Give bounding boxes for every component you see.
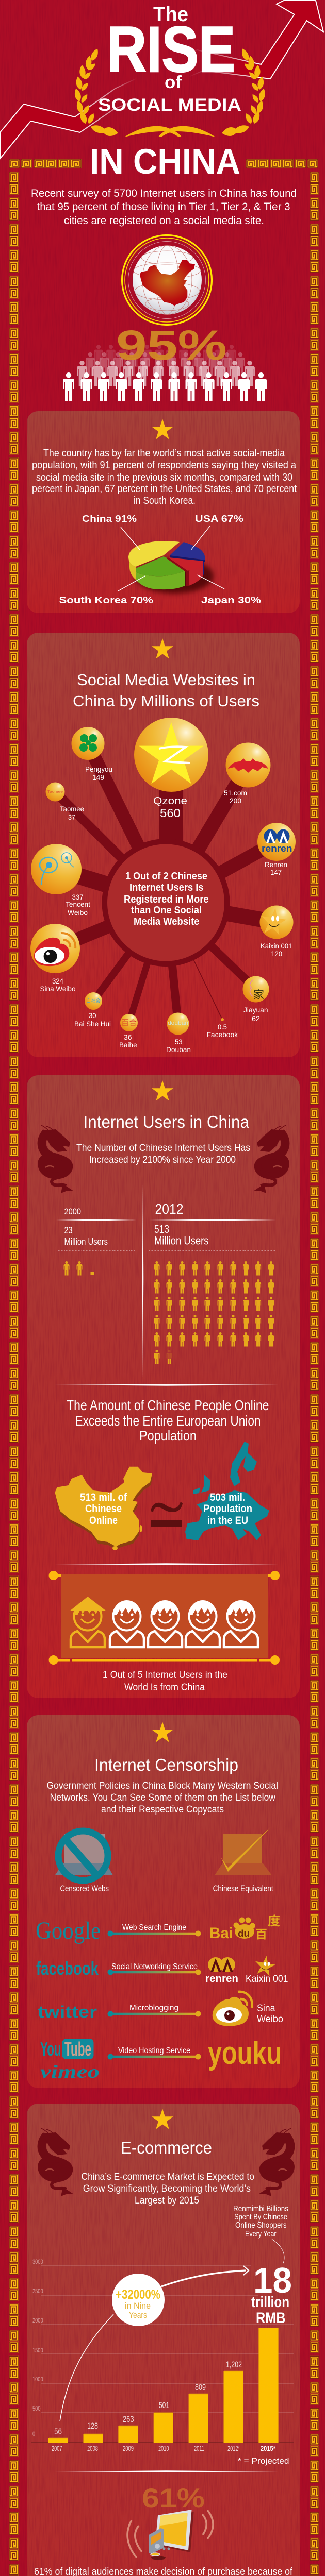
icon: star, panel 5	[152, 2109, 173, 2129]
text block: censorship policies: Networks. You Can See Some of them on the List below	[50, 1792, 275, 1803]
bubble: Sina Weibo: Sina Weibo	[40, 985, 76, 993]
bubble: Jiayuan: 62	[252, 1014, 260, 1023]
pie label: South Korea: South Korea 70%	[59, 595, 153, 605]
bubble: Taomee: Taomee	[60, 805, 84, 813]
title: of	[165, 73, 182, 92]
row: Google to Baidu: 百	[255, 1927, 267, 1941]
row: Google to Baidu: Google	[36, 1917, 101, 1944]
bubble: Bai She Hui: 白社会	[86, 998, 101, 1004]
panel: internet censorship background	[27, 1715, 300, 2088]
bar chart: online spending	[31, 2258, 294, 2466]
bubble: Kaixin 001: 120	[271, 950, 282, 958]
title: SOCIAL MEDIA	[98, 95, 241, 115]
panel: survey introduction background	[27, 411, 300, 613]
globe with China map	[122, 235, 212, 325]
text block: e-commerce growth	[82, 2172, 254, 2206]
hub text: Registered in More	[124, 894, 209, 905]
heading: internet users in China: Internet Users in China	[84, 1112, 250, 1131]
subheading: 2100 percent growth	[76, 1143, 250, 1165]
bubble: Douban: 53	[175, 1038, 183, 1046]
bubble: Tencent Weibo: Tencent	[66, 900, 90, 908]
heading: social media websites: China by Millions of Users	[73, 692, 259, 710]
meander border: right column	[310, 172, 319, 2576]
panel: social media websites background	[27, 633, 300, 1057]
bar chart: online spending: 263	[123, 2414, 134, 2424]
bubble: Facebook: 0.5	[218, 1023, 227, 1031]
icon: dragon right	[253, 1125, 286, 1193]
row: Google to Baidu: Web Search Engine	[122, 1923, 186, 1932]
bar chart: online spending: 56	[54, 2427, 62, 2436]
text block: most active population	[32, 448, 297, 506]
row: Google to Baidu	[36, 1914, 280, 1944]
bubble: Bai She Hui	[74, 992, 111, 1028]
bubble: Taomee: 37	[68, 813, 75, 821]
bubble: Qzone: 560	[160, 806, 181, 820]
row: Google to Baidu: Bai	[209, 1925, 233, 1942]
heading: China online vs EU population: Population	[139, 1428, 197, 1444]
meander border: top left run	[9, 159, 83, 168]
row: Facebook to Renren and Kaixin: facebook	[36, 1958, 99, 1979]
bubble: Tencent Weibo: Weibo	[68, 908, 88, 917]
bar chart: online spending: 1000	[32, 2376, 43, 2383]
bar chart: online spending: 2012*	[228, 2445, 240, 2452]
text block: most active population: in South Korea.	[134, 495, 196, 506]
subheading: 2100 percent growth: The Number of Chinese Internet Users Has	[76, 1143, 250, 1154]
row: Google to Baidu: 度	[268, 1914, 280, 1928]
bar chart: online spending: 2500	[32, 2287, 43, 2295]
icon: star, panel 1	[152, 419, 173, 439]
caption: 1 of 5 users	[103, 1670, 228, 1693]
caption: 1 of 5 users: World Is from China	[124, 1682, 205, 1693]
chart note: renminbi billions	[233, 2205, 288, 2264]
icon: dragon left	[41, 2128, 74, 2196]
hub text: Media Website	[134, 916, 199, 927]
heading: e-commerce: E-commerce	[121, 2138, 212, 2157]
bubble: Jiayuan: 家	[253, 989, 264, 1001]
column: 2012: 2012	[155, 1201, 184, 1217]
bubble: Taomee	[45, 782, 84, 821]
intro text: that 95 percent of those living in Tier 1, Tier 2, & Tier 3	[37, 201, 290, 213]
scroll: 1 of 5 users	[49, 1571, 280, 1665]
row: YouTube and Vimeo to Youku: vimeo	[40, 2061, 100, 2082]
column: 2012	[154, 1201, 274, 1364]
callout: 18 trillion RMB: RMB	[256, 2310, 286, 2327]
pie label: USA: USA 67%	[195, 514, 243, 524]
map: China: 513 mil. of	[80, 1492, 127, 1503]
bubble: Facebook: Facebook	[206, 1030, 238, 1039]
row: Facebook to Renren and Kaixin: Social Networking Service	[111, 1962, 198, 1971]
people rows with 95 percent	[63, 322, 267, 401]
meander border: top right run	[246, 159, 319, 168]
bubble: Renren: Renren	[265, 860, 287, 869]
text block: most active population: The country has by far the world’s most active social-media	[43, 448, 285, 459]
bubble: Qzone: Qzone	[153, 795, 187, 807]
heading: social media websites: Social Media Websites in	[77, 671, 255, 689]
bubble: Tencent Weibo: 337	[72, 893, 84, 901]
row: Twitter to Sina Weibo: Weibo	[257, 2014, 283, 2025]
heading: China online vs EU population: The Amount of Chinese People Online	[67, 1397, 269, 1413]
bubble: Bai She Hui: Bai She Hui	[74, 1020, 111, 1028]
text block: censorship policies	[46, 1781, 278, 1815]
comparison: 2000 vs 2012 users	[56, 1184, 277, 1378]
row: Google to Baidu: du	[238, 1928, 250, 1939]
icon: approved laptop	[213, 1825, 273, 1893]
bar chart: online spending: 2007	[52, 2445, 62, 2452]
column: 2000: Million Users	[64, 1236, 108, 1247]
bar chart: online spending: 2000	[32, 2317, 43, 2324]
bubble: Baihe	[119, 1014, 138, 1049]
bubble: Renren	[257, 823, 296, 876]
title: The	[153, 3, 188, 26]
bar chart: online spending: 2010	[158, 2445, 169, 2452]
bar chart: online spending: 2011	[194, 2445, 204, 2452]
bubble: Pengyou: Pengyou	[85, 766, 112, 774]
callout: 18 trillion RMB: 18	[253, 2260, 292, 2300]
text block: censorship policies: Government Policies in China Block Many Western Social	[46, 1781, 278, 1791]
map: China	[55, 1467, 153, 1550]
callout: +32000 percent: Years	[129, 2310, 147, 2320]
bar chart: online spending: 2015*	[261, 2445, 276, 2452]
bar chart: online spending: 1500	[32, 2347, 43, 2354]
row: Twitter to Sina Weibo: twitter	[38, 2003, 97, 2021]
figure: Chinese user	[70, 1597, 106, 1647]
text block: most active population: social media site in the previous six months, compared with 30	[36, 472, 293, 483]
heading: China online vs EU population: Exceeds the Entire European Union	[75, 1413, 261, 1429]
rising arrow behind title	[0, 1, 323, 159]
text block: e-commerce growth: China’s E-commerce Market is Expected to	[82, 2172, 254, 2182]
bar chart: online spending: 501	[159, 2400, 169, 2410]
bubble: Douban	[166, 1013, 191, 1054]
chart note: renminbi billions: Every Year	[245, 2230, 277, 2239]
laurel wreath	[73, 47, 267, 138]
row: Facebook to Renren and Kaixin: Kaixin 001	[246, 1974, 288, 1985]
intro text	[31, 188, 297, 227]
column: 2000	[64, 1207, 108, 1276]
bubble: Jiayuan	[242, 976, 269, 1023]
callout: 18 trillion RMB	[251, 2260, 292, 2327]
heading: social media websites	[73, 671, 259, 710]
bar chart: online spending: 500	[32, 2405, 41, 2412]
large 95 percent figure: 95%	[116, 322, 227, 369]
callout: +32000 percent: +32000%	[116, 2287, 160, 2302]
bubble: Tencent Weibo	[31, 844, 90, 917]
text block: most active population: percent in Japan, 67 percent in the United States, and 70 percent	[32, 483, 297, 495]
bubble: Pengyou	[71, 727, 112, 782]
pie label: China: China 91%	[82, 514, 137, 524]
panel: internet users background	[27, 1075, 300, 1698]
callout: +32000 percent	[112, 2274, 165, 2326]
bubble: Sina Weibo: 324	[52, 977, 63, 985]
title: IN CHINA	[90, 142, 240, 181]
heading: internet censorship: Internet Censorship	[94, 1755, 238, 1774]
row: YouTube and Vimeo to Youku: youku	[208, 2036, 282, 2071]
bubble: Renren: 147	[270, 868, 282, 876]
bubble: Taomee: Taomee	[47, 790, 63, 794]
map: European Union: 503 mil.	[210, 1492, 245, 1503]
text block: most active population: population, with 91 percent of respondents saying they visited a	[32, 460, 297, 471]
bar chart: online spending: 1,202	[226, 2360, 242, 2369]
bubble: Qzone	[134, 718, 208, 820]
caption: 1 of 5 users: 1 Out of 5 Internet Users in the	[103, 1670, 228, 1681]
column: 2012: Million Users	[154, 1234, 208, 1247]
icon: approximately equal sign	[151, 1502, 183, 1527]
map: European Union: Population	[203, 1503, 252, 1515]
arrow: growth curve	[60, 2266, 249, 2421]
bubble: Douban: douban	[168, 1020, 188, 1026]
bubble: 51.com: 51.com	[224, 789, 247, 797]
map: European Union: in the EU	[207, 1515, 248, 1527]
pie label: Japan: Japan 30%	[201, 595, 261, 605]
row: Twitter to Sina Weibo: Microblogging	[129, 2004, 178, 2012]
title	[90, 3, 241, 181]
bubble: Baihe: Baihe	[119, 1041, 137, 1049]
meander border: left column	[9, 172, 19, 2576]
row: Twitter to Sina Weibo	[38, 1992, 283, 2026]
map: China: Chinese	[85, 1503, 122, 1515]
intro text: Recent survey of 5700 Internet users in China has found	[31, 188, 297, 199]
column: 2000: 2000	[64, 1207, 81, 1216]
bubble: 51.com	[224, 743, 270, 805]
bar chart: online spending: 3000	[32, 2258, 43, 2265]
text block: e-commerce growth: Grow Significantly, Becoming the World’s	[83, 2183, 251, 2194]
text block: e-commerce growth: Largest by 2015	[135, 2195, 199, 2206]
row: YouTube and Vimeo to Youku: You	[40, 2039, 61, 2060]
bubble: Baihe: 36	[124, 1033, 132, 1041]
row: Facebook to Renren and Kaixin: renren	[205, 1973, 238, 1985]
hub text: than One Social	[131, 905, 202, 916]
bubble: Renren: renren	[262, 843, 292, 854]
chart note: renminbi billions: Spent By Chinese	[234, 2213, 287, 2222]
figure: 61 percent: 61%	[142, 2483, 205, 2514]
icon: star, panel 4	[152, 1722, 173, 1742]
intro text: cities are registered on a social media site.	[64, 215, 264, 227]
hub text: Internet Users Is	[129, 882, 203, 893]
bubble: 51.com: 200	[230, 796, 241, 805]
icon: dragon right	[258, 2128, 291, 2196]
column: 2012: 513	[154, 1223, 169, 1235]
row: Facebook to Renren and Kaixin	[36, 1954, 288, 1985]
bubble: Kaixin 001	[259, 906, 293, 958]
icon: star, panel 3	[152, 1080, 173, 1101]
chart note: renminbi billions: Renmimbi Billions	[233, 2205, 288, 2213]
bar chart: online spending: 128	[87, 2421, 98, 2431]
panel: e-commerce background	[27, 2104, 300, 2576]
bar chart: online spending: 2008	[87, 2445, 98, 2452]
bubble: Kaixin 001: Kaixin 001	[261, 942, 293, 950]
icon: approved laptop: Chinese Equivalent	[213, 1884, 273, 1893]
bubble: Sina Weibo	[30, 924, 80, 993]
bar chart: online spending: 809	[195, 2382, 206, 2392]
bar chart: online spending: * = Projected	[238, 2456, 289, 2466]
title: RISE	[107, 14, 235, 86]
callout: +32000 percent: in Nine	[125, 2301, 151, 2311]
pie chart: share of visitors by country	[59, 514, 261, 605]
bubble: Pengyou: 149	[92, 774, 104, 782]
map: China: Online	[89, 1515, 118, 1527]
row: Twitter to Sina Weibo: Sina	[257, 2003, 275, 2014]
row: YouTube and Vimeo to Youku	[40, 2036, 282, 2082]
icon: dragon left	[41, 1125, 74, 1193]
bubble: Jiayuan: Jiayuan	[243, 1006, 268, 1014]
bar chart: online spending: 0	[32, 2430, 35, 2437]
hub and spoke chart of social sites	[30, 718, 296, 1054]
bar chart: online spending: 2009	[123, 2445, 134, 2452]
chart note: renminbi billions: Online Shoppers	[235, 2221, 287, 2230]
hub text: 1 Out of 2 Chinese	[125, 871, 207, 882]
hub text	[124, 871, 209, 927]
row: YouTube and Vimeo to Youku: Tube	[64, 2039, 91, 2060]
bubble: Douban: Douban	[166, 1045, 191, 1054]
callout: 18 trillion RMB: trillion	[251, 2294, 289, 2311]
map: European Union	[185, 1442, 269, 1540]
row: YouTube and Vimeo to Youku: Video Hosting Service	[118, 2046, 190, 2055]
heading: China online vs EU population	[67, 1397, 269, 1444]
figures: four other users	[110, 1600, 258, 1647]
icon: censored laptop	[55, 1831, 113, 1893]
column: 2000: 23	[64, 1225, 72, 1235]
icon: censored laptop: Censored Webs	[60, 1884, 109, 1893]
bubble: Facebook	[206, 1018, 238, 1039]
icon: star, panel 2	[152, 638, 173, 659]
text block: censorship policies: and their Respective Copycats	[101, 1804, 224, 1815]
icon: tablet and music player	[127, 2510, 213, 2560]
bubble: Baihe: 百合	[121, 1019, 137, 1027]
bubble: Bai She Hui: 30	[89, 1011, 96, 1020]
subheading: 2100 percent growth: Increased by 2100% since Year 2000	[89, 1155, 236, 1165]
